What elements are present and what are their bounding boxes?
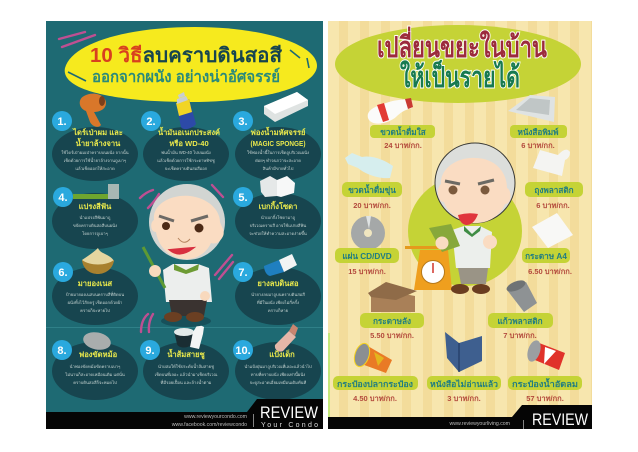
footer bar: www.reviewyourcondo.com: [184, 414, 247, 420]
tip 3: magic sponge: ต่อยๆ ทำจนกว่าจะสะอาด: [255, 158, 301, 163]
title line 2: ให้เป็นรายได้: [400, 59, 520, 94]
tip 9: soap and water: น้ำส้มสายชู: [167, 348, 205, 360]
tip 3: magic sponge: ใช้ฟองน้ำนี้ในการเช็ดถูบริเวณผนัง: [247, 149, 309, 156]
item: plastic cup: แก้วพลาสติก: [497, 316, 543, 326]
tip 2: WD-40: น้ำมันอเนกประสงค์: [158, 126, 220, 137]
tip 5: baking soda: เบกกิ้งโซดา: [259, 200, 297, 211]
tip 1: hair dryer: [52, 94, 138, 181]
tip 7: eraser: ที่มีในผนัง เพียงไม่กี่ครั้ง: [257, 299, 299, 305]
tip 7: eraser: นำยางลบมาถูบนคราบดินสอสี: [251, 292, 305, 298]
tip 3: magic sponge: 3.: [238, 116, 248, 128]
logo: Your Living: [532, 429, 588, 436]
item: plastic bag: 6 บาท/กก.: [536, 201, 570, 210]
item: soda can: กระป๋องน้ำอัดลม: [512, 377, 578, 389]
tip 7: eraser: [233, 254, 321, 325]
tip 10: baby powder: แป้งเด็ก: [269, 348, 295, 359]
tip 9: soap and water: 9.: [145, 345, 155, 357]
tip 9: soap and water: ที่มีรอยเปื้อน และล้างน้ำตาม: [160, 379, 212, 385]
title banner: [59, 27, 317, 102]
item: old book: [427, 332, 501, 403]
tip 9: soap and water: เช็ดบนที่เลอะ แล้วนำมาเช็ดบริเวณ: [155, 371, 217, 377]
tip 10: baby powder: นำแป้งฝุ่นมาถูบริเวณที่เลอะแล้วนำไป: [244, 363, 312, 370]
panel: stain removal infographic: [46, 21, 323, 429]
accent strokes around character: [140, 185, 233, 332]
tip 4: toothbrush: [52, 184, 138, 249]
item: CD/DVD: แผ่น CD/DVD: [342, 252, 392, 261]
tip 3: magic sponge: ฟองน้ำมหัศจรรย์: [250, 126, 306, 137]
tip 7: eraser: 7.: [238, 267, 248, 279]
character: man holding money: [405, 143, 522, 294]
tip 8: scouring pad: คราบดินสอสีก็จะหมดไป: [73, 379, 117, 385]
tip 1: hair dryer: เช็ดด้วยการใช้น้ำยาล้างจานถูเบาๆ: [64, 157, 126, 164]
tip 8: scouring pad: [52, 330, 138, 400]
item: CD/DVD: 15 บาท/กก.: [348, 267, 386, 276]
footer bar: www.reviewyourliving.com: [449, 421, 510, 427]
tip 9: soap and water: นำผสมให้ใช้ประดับน้ำส้มสายชู: [158, 363, 214, 370]
title banner: [335, 25, 581, 103]
tip 4: toothbrush: ขจัดคราบดินสอสีบนผนัง: [73, 223, 117, 228]
item: plastic cup: [488, 278, 553, 340]
tip 6: mayonnaise: ป้ายมายองเนสบนคราบสีที่ติดบน: [66, 291, 124, 297]
item: A4 paper: กระดาษ A4: [525, 252, 567, 261]
item: fish can: [333, 341, 418, 403]
tip 1: hair dryer: แล้วเช็ดออกให้สะอาด: [75, 165, 115, 171]
tip 2: WD-40: จะเช็ดคราบดินสอสีออก: [165, 165, 208, 171]
item: plastic bag: ถุงพลาสติก: [534, 186, 574, 196]
footer bar: www.facebook.com/reviewyourliving: [427, 429, 510, 435]
tip 8: scouring pad: 8.: [57, 345, 67, 357]
item: cloudy bottle: 20 บาท/กก.: [353, 201, 391, 210]
character: man with pencil: [143, 184, 225, 327]
logo: Your Condo: [261, 422, 318, 429]
tip 2: WD-40: แล้วเช็ดด้วยการใช้กระดาษทิชชู: [157, 157, 215, 164]
logo: [533, 414, 588, 425]
tip 9: soap and water: [140, 324, 229, 400]
item: newspaper: [508, 95, 567, 150]
item: cardboard box: [360, 282, 424, 340]
tip 7: eraser: ยางลบดินสอ: [257, 279, 299, 288]
tip 4: toothbrush: นำแปรงสีฟันมาถู: [80, 215, 111, 221]
tip 6: mayonnaise: มายองเนส: [78, 279, 113, 288]
tip 8: scouring pad: นำฟองขัดหม้อขัดคราบเบาๆ: [70, 364, 120, 369]
item: soda can: 57 บาท/กก.: [526, 394, 564, 403]
title line 2: ออกจากผนัง อย่างน่าอัศจรรย์: [92, 67, 280, 86]
item: clear bottle: 24 บาท/กก.: [384, 141, 422, 150]
item: plastic cup: 7 บาท/กก.: [503, 331, 537, 340]
tip 3: magic sponge: สินค้ามีขายทั่วไป: [262, 165, 294, 171]
tip 10: baby powder: ทาบที่คราบผนัง เพียงเท่านี้ผนัง: [251, 371, 305, 377]
tip 2: WD-40: หรือ WD-40: [169, 139, 209, 148]
tip 1: hair dryer: น้ำยาล้างจาน: [76, 137, 121, 148]
item: A4 paper: 6.50 บาท/กก.: [528, 267, 572, 276]
item: A4 paper: [522, 213, 573, 276]
footer bar: [46, 399, 323, 429]
footer bar: www.facebook.com/reviewcondo: [172, 422, 247, 428]
panel: turn household waste into income: [328, 21, 592, 436]
item: CD/DVD: [335, 216, 399, 276]
item: old book: หนังสือไม่อ่านแล้ว: [430, 379, 498, 389]
tip 3: magic sponge: (MAGIC SPONGE): [250, 139, 306, 148]
item: soda can: [508, 339, 582, 403]
tip 6: mayonnaise: 6.: [58, 267, 68, 279]
tip 6: mayonnaise: คราบก็จะหายไป: [80, 307, 110, 313]
logo: [261, 406, 318, 427]
item: plastic bag: [525, 150, 583, 210]
tip 5: baking soda: นำเบกกิ้งโซดามาถู: [261, 214, 296, 221]
tip 8: scouring pad: ฟองขัดหม้อ: [79, 350, 118, 359]
item: newspaper: 6 บาท/กก.: [521, 141, 555, 150]
item: cloudy bottle: ขวดน้ำดื่มขุ่น: [348, 183, 396, 196]
tip 4: toothbrush: 4.: [58, 192, 68, 204]
tip 1: hair dryer: ไดร์เป่าผม และ: [72, 127, 123, 137]
logo: REVIEW: [260, 403, 318, 422]
weighing scale: [405, 246, 452, 290]
item: old book: 3 บาท/กก.: [447, 394, 481, 403]
tip 1: hair dryer: ใช้ไดร์เป่าผมเป่าคราบบนผนัง จากนั้น: [61, 149, 129, 155]
item: clear bottle: ขวดน้ำดื่มใส: [380, 125, 427, 137]
tip 5: baking soda: [233, 176, 321, 249]
item: cardboard box: 5.50 บาท/กก.: [370, 331, 414, 340]
title line 1: 10 วิธีลบคราบดินสอสี: [90, 44, 283, 67]
tip 10: baby powder: 10.: [235, 345, 251, 357]
tip 2: WD-40: [141, 92, 229, 181]
tip 10: baby powder: จะดูสะอาดเอี่ยมเหมือนเดิมทันที: [250, 379, 307, 386]
tip 2: WD-40: 2.: [146, 116, 156, 128]
tip 10: baby powder: [233, 324, 321, 400]
tip 6: mayonnaise: ผนังทิ้งไว้สักครู่ เช็ดออกด้วยผ้า: [68, 299, 122, 306]
tip 5: baking soda: จะช่วยให้ทำความสะอาดง่ายขึ้น: [249, 230, 307, 236]
footer bar: [328, 405, 592, 429]
item: fish can: 4.50 บาท/กก.: [353, 394, 397, 403]
item: cloudy bottle: [342, 153, 402, 210]
tip 6: mayonnaise: [52, 248, 138, 325]
tip 7: eraser: คราบก็หาย: [268, 307, 289, 313]
tip 4: toothbrush: โดยการถูเบาๆ: [82, 231, 108, 237]
item: clear bottle: [368, 98, 435, 150]
item: cardboard box: กระดาษลัง: [373, 317, 411, 326]
tip 8: scouring pad: ไม่นานก็สะอาดเหมือนเดิม แต่นั่น: [64, 371, 125, 377]
tip 2: WD-40: พ่นน้ำมัน WD-40 ไปบนผนัง: [161, 149, 211, 155]
title line 1: เปลี่ยนขยะในบ้าน: [377, 26, 547, 64]
item: newspaper: หนังสือพิมพ์: [517, 127, 559, 137]
tip 5: baking soda: 5.: [238, 192, 248, 204]
tip 5: baking soda: บริเวณคราบสี อาจใช้แปรงสีฟัน: [250, 222, 306, 228]
logo: REVIEW: [532, 410, 588, 429]
item: fish can: กระป๋องปลากระป๋อง: [337, 380, 413, 389]
tip 4: toothbrush: แปรงสีฟัน: [79, 202, 112, 211]
tip 3: magic sponge: [233, 92, 321, 181]
tip 1: hair dryer: 1.: [57, 116, 67, 128]
